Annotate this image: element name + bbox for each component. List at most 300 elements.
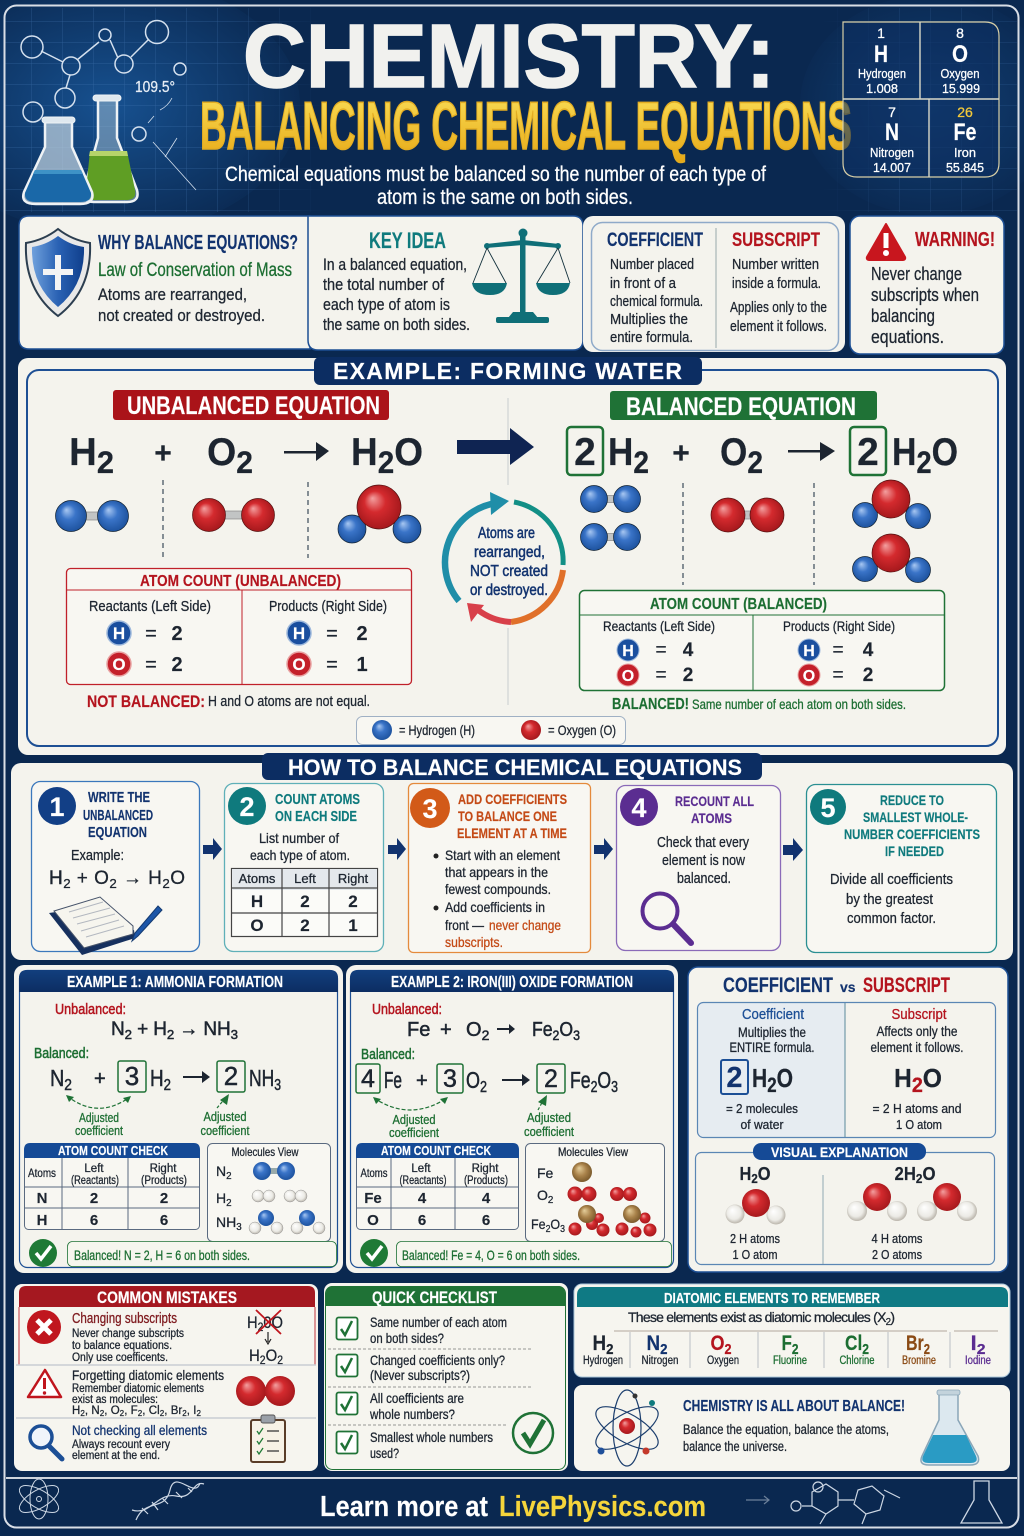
step 3: front — <box>445 917 484 933</box>
elements: F <box>782 1332 794 1355</box>
element: iron: Fe <box>954 119 976 146</box>
subscript side: H <box>894 1063 913 1093</box>
mistake: changing subscripts: 2 <box>277 1353 283 1367</box>
body text: Balance the equation, balance the atoms, <box>683 1422 889 1437</box>
molecules view <box>526 1144 664 1242</box>
molecules view: 2 <box>546 1224 550 1235</box>
table: atom count balanced: 2 <box>863 665 873 686</box>
mini table: H <box>251 892 263 911</box>
table: atom count check: ATOM COUNT CHECK <box>58 1144 168 1158</box>
subscript side: Subscript <box>892 1007 946 1023</box>
footer link text <box>320 1491 706 1523</box>
arrow: unbalanced to balanced <box>457 428 534 465</box>
table: atom count check: ATOM COUNT CHECK <box>381 1144 491 1158</box>
panel: example 1 ammonia <box>14 965 343 1273</box>
step 1: 2 <box>109 876 117 891</box>
coefficient side: H <box>752 1063 771 1093</box>
step 3: ELEMENT AT A TIME <box>457 825 567 841</box>
mistake: changing subscripts: Never change subscripts <box>72 1328 184 1340</box>
mistake: changing subscripts: H <box>249 1346 261 1365</box>
heading: KEY IDEA <box>369 228 446 253</box>
element: hydrogen: Hydrogen <box>858 66 906 81</box>
elements: Nitrogen <box>642 1355 678 1367</box>
unbalanced equation: Fe <box>532 1019 555 1041</box>
table: atom count balanced: H <box>622 643 634 660</box>
table: atom count check: (Products) <box>464 1175 508 1187</box>
step 1: H <box>49 868 63 889</box>
unbalanced equation: → NH <box>174 1019 231 1040</box>
balanced verdict <box>29 1239 336 1267</box>
mistake: forgetting diatomic elements: , Br <box>164 1405 182 1417</box>
verdict: not balanced: NOT BALANCED: <box>87 692 205 711</box>
mistake: forgetting diatomic elements: , N <box>85 1405 100 1417</box>
elements: N <box>646 1332 662 1355</box>
elements: Br <box>906 1332 929 1355</box>
icon: flask sketch <box>961 1481 1002 1523</box>
table: atom count check: 2 <box>160 1190 168 1207</box>
table: atom count balanced: O <box>622 668 634 685</box>
mistake: not checking all elements: element at the end. <box>72 1450 160 1462</box>
heading: vs <box>840 979 856 995</box>
step 3: Start with an element <box>445 847 560 863</box>
elements: Cl <box>845 1332 866 1355</box>
mistake: forgetting diatomic elements: , F <box>124 1405 138 1417</box>
table: atom count balanced: Products (Right Side) <box>783 618 895 634</box>
subscript side: 1 O atom <box>896 1117 942 1132</box>
subscript column: inside a formula. <box>732 275 821 292</box>
coefficient column: Multiplies the <box>610 311 688 328</box>
legend: = Oxygen (O) <box>548 723 616 738</box>
table: atom count balanced <box>580 590 944 690</box>
icon: blue flask <box>23 117 93 204</box>
elements: 2 <box>977 1342 986 1358</box>
arrow <box>783 838 803 861</box>
body text: Atoms are rearranged, <box>98 285 247 304</box>
table: atom count check: 6 <box>418 1212 426 1229</box>
coefficient side: 2 <box>767 1074 777 1097</box>
subscript column: SUBSCRIPT <box>732 230 820 251</box>
body text: the total number of <box>323 276 444 294</box>
mini table: Atoms <box>239 871 276 886</box>
unbalanced equation <box>55 1001 238 1042</box>
mini table: 2 <box>300 892 310 911</box>
step 1: → H <box>117 868 162 889</box>
heading: WHY BALANCE EQUATIONS? <box>98 232 298 254</box>
visual explanation: 2 H atoms <box>730 1231 780 1246</box>
balanced equation: 2 <box>544 1065 558 1093</box>
unbalanced equation: 2 <box>553 1027 560 1043</box>
mistake: forgetting diatomic elements: 2 <box>120 1409 125 1418</box>
mistake: changing subscripts <box>27 1310 283 1367</box>
header <box>350 970 674 992</box>
icon: flask <box>921 1390 979 1465</box>
header: QUICK CHECKLIST <box>372 1289 497 1307</box>
step 5: REDUCE TO <box>880 792 944 808</box>
step 5: SMALLEST WHOLE- <box>863 809 968 825</box>
panel: why balance equations <box>19 216 310 349</box>
mistake: not checking all elements: Not checking all elements <box>72 1422 207 1438</box>
balanced equation: Balanced: <box>361 1046 415 1063</box>
step 5: IF NEEDED <box>885 843 944 859</box>
intro text: atom is the same on both sides. <box>377 186 633 209</box>
callout: atoms rearranged cycle: Atoms are <box>478 525 535 542</box>
step 1: 2 <box>162 876 170 891</box>
mistake: changing subscripts: 0O <box>263 1313 283 1332</box>
balanced equation: Fe <box>384 1067 402 1093</box>
coefficient column: COEFFICIENT <box>607 230 703 251</box>
table: atom count check <box>24 1143 200 1230</box>
verdict: balanced: BALANCED! <box>612 696 689 713</box>
step 2: each type of atom. <box>250 847 350 863</box>
balanced equation: O <box>597 1067 611 1093</box>
panel: diatomic elements <box>574 1284 1010 1377</box>
elements: O <box>710 1332 727 1355</box>
balanced equation: 3 <box>274 1076 281 1094</box>
table: atom count check: (Reactants) <box>400 1175 447 1187</box>
subscript side: element it follows. <box>870 1040 964 1055</box>
callout: atoms rearranged cycle: NOT created <box>470 563 548 580</box>
elements: Fluorine <box>773 1355 807 1367</box>
elements: 2 <box>924 1342 930 1358</box>
visual explanation: 2 <box>916 1172 922 1186</box>
table: atom count check: 6 <box>482 1212 490 1229</box>
balanced equation: Fe <box>570 1067 597 1093</box>
header: DIATOMIC ELEMENTS TO REMEMBER <box>664 1291 880 1307</box>
balanced equation <box>356 1046 618 1096</box>
balanced equation: 2 <box>633 445 649 480</box>
step 3: never change <box>489 917 561 933</box>
icon: shield <box>26 229 90 316</box>
visual explanation <box>696 1143 994 1264</box>
table: atom count unbalanced: Reactants (Left Side) <box>89 598 211 615</box>
table: atom count unbalanced: = <box>326 654 338 676</box>
elements: Iodine <box>965 1355 991 1367</box>
table: atom count unbalanced: O <box>112 655 126 674</box>
annotations: adjusted coefficient: coefficient <box>75 1123 123 1138</box>
table: atom count balanced: ATOM COUNT (BALANCED) <box>650 596 827 613</box>
mistake: not checking all elements: Always recount every <box>72 1439 170 1451</box>
table: atom count balanced: = <box>832 665 844 686</box>
mini table: 2 <box>348 892 358 911</box>
icon: warning triangle <box>867 224 905 260</box>
balanced equation: H <box>892 431 920 474</box>
callout: atoms rearranged cycle <box>445 492 563 622</box>
visual explanation: VISUAL EXPLANATION <box>771 1144 908 1160</box>
table: atom count balanced: O <box>803 668 815 685</box>
subscript column: Number written <box>732 256 819 273</box>
intro: ) <box>890 1309 895 1325</box>
checklist item 1 <box>336 1315 507 1346</box>
table: atom count unbalanced: = <box>326 623 338 645</box>
table: atom count check: 6 <box>90 1212 98 1229</box>
checklist item 4: Smallest whole numbers <box>370 1430 493 1445</box>
subscript side: = 2 H atoms and <box>872 1101 962 1116</box>
element: nitrogen: 14.007 <box>873 160 911 175</box>
molecules: balanced <box>580 480 930 582</box>
step 1: EQUATION <box>88 825 147 841</box>
element: iron <box>946 104 984 175</box>
header <box>577 1287 1008 1307</box>
body text: subscripts when <box>871 285 979 305</box>
verdict: balanced <box>612 696 906 713</box>
molecules view: 2 <box>548 1195 553 1206</box>
body text <box>323 256 470 334</box>
mistake: forgetting diatomic elements: , Cl <box>142 1405 160 1417</box>
unbalanced equation: 2 <box>97 445 114 480</box>
step 3: fewest compounds. <box>445 881 551 897</box>
table: atom count unbalanced: 1 <box>356 654 368 676</box>
mistake: changing subscripts: to balance equations. <box>72 1340 172 1352</box>
icon: magnifier <box>642 894 691 943</box>
header <box>326 1286 565 1307</box>
periodic table tiles <box>843 22 999 177</box>
checklist item 3: All coefficients are <box>370 1391 464 1406</box>
elements: Chlorine <box>840 1355 874 1367</box>
mistake: changing subscripts: Only use coefficents. <box>72 1352 168 1364</box>
icon: atom sketch <box>15 1479 63 1519</box>
verdict: balanced: Same number of each atom on both sides. <box>692 696 906 712</box>
molecules view: 2 <box>226 1171 232 1182</box>
annotations: adjusted coefficient: Adjusted <box>79 1110 119 1125</box>
step 1: Example: <box>71 848 124 864</box>
element: nitrogen: N <box>885 119 899 146</box>
table: atom count check: Fe <box>364 1190 382 1207</box>
annotations: adjusted coefficient: coefficient <box>200 1123 250 1138</box>
unbalanced equation <box>372 1001 580 1043</box>
unbalanced equation: H <box>351 431 379 474</box>
header: EXAMPLE 2: IRON(III) OXIDE FORMATION <box>391 974 633 991</box>
header: molecule sketch: 109.5° <box>135 79 175 96</box>
element: hydrogen: 1.008 <box>866 81 898 96</box>
element: oxygen: Oxygen <box>940 66 980 81</box>
unbalanced equation: + <box>440 1019 452 1041</box>
element: oxygen: O <box>952 41 968 68</box>
icon: green flask <box>83 95 138 202</box>
unbalanced equation: 3 <box>231 1027 238 1042</box>
panel: chemistry is all about balance <box>574 1385 1010 1471</box>
mistake: forgetting diatomic elements: 2 <box>197 1409 202 1418</box>
balanced equation: NH <box>249 1065 282 1091</box>
arrow <box>388 838 406 860</box>
table: atom count balanced: = <box>655 640 667 661</box>
step 3 <box>408 784 590 952</box>
panel: coefficient and subscript definitions <box>583 216 845 352</box>
step 3: Add coefficients in <box>445 899 545 915</box>
panel: common mistakes <box>14 1284 318 1471</box>
balanced equation: N <box>50 1065 67 1091</box>
table: atom count check: Right <box>150 1163 177 1175</box>
mistake: forgetting diatomic elements: Remember diatomic elements <box>72 1383 204 1395</box>
table: atom count balanced: Reactants (Left Side) <box>603 618 715 634</box>
unbalanced equation: 3 <box>573 1027 580 1043</box>
header: COMMON MISTAKES <box>97 1289 237 1307</box>
element: nitrogen: Nitrogen <box>870 145 914 160</box>
element: oxygen: 8 <box>956 25 964 41</box>
mistake: changing subscripts: 2 <box>260 1353 266 1367</box>
balanced equation <box>567 427 958 480</box>
heading <box>723 974 950 997</box>
body text: the same on both sides. <box>323 316 470 334</box>
step 4: ATOMS <box>691 810 732 826</box>
table: atom count unbalanced: O <box>292 655 306 674</box>
visual explanation: 2H <box>894 1164 918 1184</box>
step 4: 4 <box>631 793 647 823</box>
balanced equation: 2 <box>591 1078 597 1096</box>
body text: In a balanced equation, <box>323 256 467 274</box>
table: atom count check: Atoms <box>28 1168 56 1180</box>
step 3: 3 <box>422 794 438 824</box>
step 5: NUMBER COEFFICIENTS <box>844 826 980 842</box>
legend: = Hydrogen (H) <box>399 723 475 738</box>
elements: 2 <box>724 1342 732 1358</box>
molecules view: O <box>537 1187 548 1203</box>
step 5: by the greatest <box>846 891 934 908</box>
icon: balance scale <box>472 228 570 323</box>
step 3: TO BALANCE ONE <box>458 808 557 824</box>
balanced equation: O <box>720 431 750 474</box>
panel: warning <box>850 216 1004 354</box>
balanced equation: H <box>608 431 636 474</box>
icon: atom <box>590 1390 664 1466</box>
heading: SUBSCRIPT <box>863 974 950 997</box>
visual explanation: 2 O atoms <box>872 1247 922 1262</box>
unbalanced equation: + <box>154 437 172 470</box>
annotations: adjusted coefficient <box>66 1094 250 1138</box>
molecules view: Molecules View <box>558 1145 628 1159</box>
step 4: RECOUNT ALL <box>675 793 754 809</box>
table: atom count check: (Reactants) <box>71 1175 119 1187</box>
intro: 2 <box>886 1317 891 1328</box>
unbalanced equation: 2 <box>482 1027 490 1043</box>
step 4 <box>616 786 780 950</box>
panel: key idea <box>308 216 583 350</box>
step 3: subscripts. <box>445 934 503 950</box>
callout: atoms rearranged cycle: or destroyed. <box>470 582 548 599</box>
table: atom count check: O <box>367 1212 379 1229</box>
mini table: Right <box>338 871 369 886</box>
step 2: ON EACH SIDE <box>275 809 357 825</box>
balanced equation: + <box>416 1070 428 1092</box>
balanced equation: 2 <box>747 445 763 480</box>
elements: Bromine <box>902 1355 936 1367</box>
body text <box>871 264 979 347</box>
mistake: changing subscripts: Changing subscripts <box>72 1311 177 1327</box>
step 4: balanced. <box>677 871 731 887</box>
element: iron: 26 <box>957 104 973 120</box>
arrow <box>203 838 222 860</box>
callout: atoms rearranged cycle: rearranged, <box>474 544 545 561</box>
subscript side: Affects only the <box>876 1024 958 1039</box>
step 1: 1 <box>49 792 65 822</box>
header: EXAMPLE 1: AMMONIA FORMATION <box>67 974 283 991</box>
checklist item 3 <box>336 1391 464 1422</box>
mistake: forgetting diatomic elements: 2 <box>160 1409 165 1418</box>
header <box>19 970 338 992</box>
step 1: WRITE THE <box>88 790 150 806</box>
body text: each type of atom is <box>323 296 450 314</box>
body text: not created or destroyed. <box>98 306 265 325</box>
unbalanced equation: 2 <box>167 1027 174 1042</box>
balanced equation: 3 <box>611 1078 618 1096</box>
subscript column: Applies only to the <box>730 299 827 316</box>
header <box>19 1286 315 1307</box>
visual explanation: O <box>922 1164 936 1184</box>
table: atom count unbalanced: = <box>145 654 157 676</box>
balanced equation: 2 <box>480 1078 487 1096</box>
table: atom count check: 4 <box>418 1190 427 1207</box>
table: atom count check: Right <box>472 1163 499 1175</box>
balanced equation: 2 <box>164 1076 171 1094</box>
balanced equation: 3 <box>125 1061 139 1091</box>
table: atom count check: Left <box>84 1163 104 1175</box>
visual explanation: 1 O atom <box>732 1247 778 1262</box>
label: unbalanced equation: UNBALANCED EQUATION <box>127 392 380 420</box>
table: atom count balanced: = <box>655 665 667 686</box>
unbalanced equation <box>69 431 423 480</box>
unbalanced equation: O <box>466 1019 482 1041</box>
coefficient side: Multiplies the <box>738 1025 806 1040</box>
element: hydrogen <box>858 25 906 96</box>
section heading: HOW TO BALANCE CHEMICAL EQUATIONS <box>288 755 742 780</box>
molecules view: Molecules View <box>232 1145 299 1159</box>
mini table: O <box>250 916 264 935</box>
element: iron: Iron <box>954 145 976 160</box>
step 2: List number of <box>259 830 339 846</box>
unbalanced equation: Unbalanced: <box>55 1001 126 1018</box>
unbalanced equation: 2 <box>125 1027 132 1042</box>
intro text: Chemical equations must be balanced so the number of each type of <box>225 163 766 186</box>
mini table <box>232 868 378 936</box>
elements: 2 <box>606 1342 614 1358</box>
table: atom count check: Atoms <box>360 1168 388 1180</box>
elements: 2 <box>660 1342 668 1358</box>
coefficient side: = 2 molecules <box>726 1101 798 1116</box>
body text: balancing <box>871 306 935 326</box>
balanced equation: 2 <box>574 431 596 474</box>
balanced equation: H <box>150 1065 167 1091</box>
intro: These elements exist as diatomic molecules (X <box>628 1309 886 1325</box>
mini table: 2 <box>300 916 310 935</box>
balanced verdict: Balanced! N = 2, H = 6 on both sides. <box>74 1247 250 1263</box>
elements: Hydrogen <box>583 1355 623 1367</box>
title: CHEMISTRY: <box>243 7 775 107</box>
checklist item 1: Same number of each atom <box>370 1315 507 1330</box>
annotations: adjusted coefficient <box>373 1095 574 1140</box>
mini table: Left <box>294 871 316 886</box>
mistake: forgetting diatomic elements: exist as molecules: <box>72 1394 158 1406</box>
table: atom count balanced: 2 <box>683 665 693 686</box>
balanced equation: 3 <box>443 1065 457 1093</box>
coefficient column: entire formula. <box>610 329 693 346</box>
annotations: adjusted coefficient: Adjusted <box>527 1110 571 1125</box>
coefficient side: 2 <box>726 1062 743 1094</box>
comparison box <box>697 1002 996 1138</box>
mistake: forgetting diatomic elements: H <box>72 1405 80 1417</box>
subscript column: element it follows. <box>730 318 827 335</box>
mistake: forgetting diatomic elements: 2 <box>80 1409 85 1418</box>
visual explanation: 4 H atoms <box>872 1231 923 1246</box>
step 2: 2 <box>239 792 255 822</box>
table: atom count unbalanced: Products (Right Side) <box>269 598 387 615</box>
visual explanation: 2 <box>751 1172 758 1186</box>
unbalanced equation: O <box>394 431 423 474</box>
molecules: unbalanced <box>56 485 421 543</box>
elements: 2 <box>792 1342 798 1358</box>
body text: equations. <box>871 327 944 347</box>
step 2 <box>224 784 384 952</box>
table: atom count balanced: 4 <box>863 640 874 661</box>
icon: molecule sketch <box>746 1482 900 1524</box>
